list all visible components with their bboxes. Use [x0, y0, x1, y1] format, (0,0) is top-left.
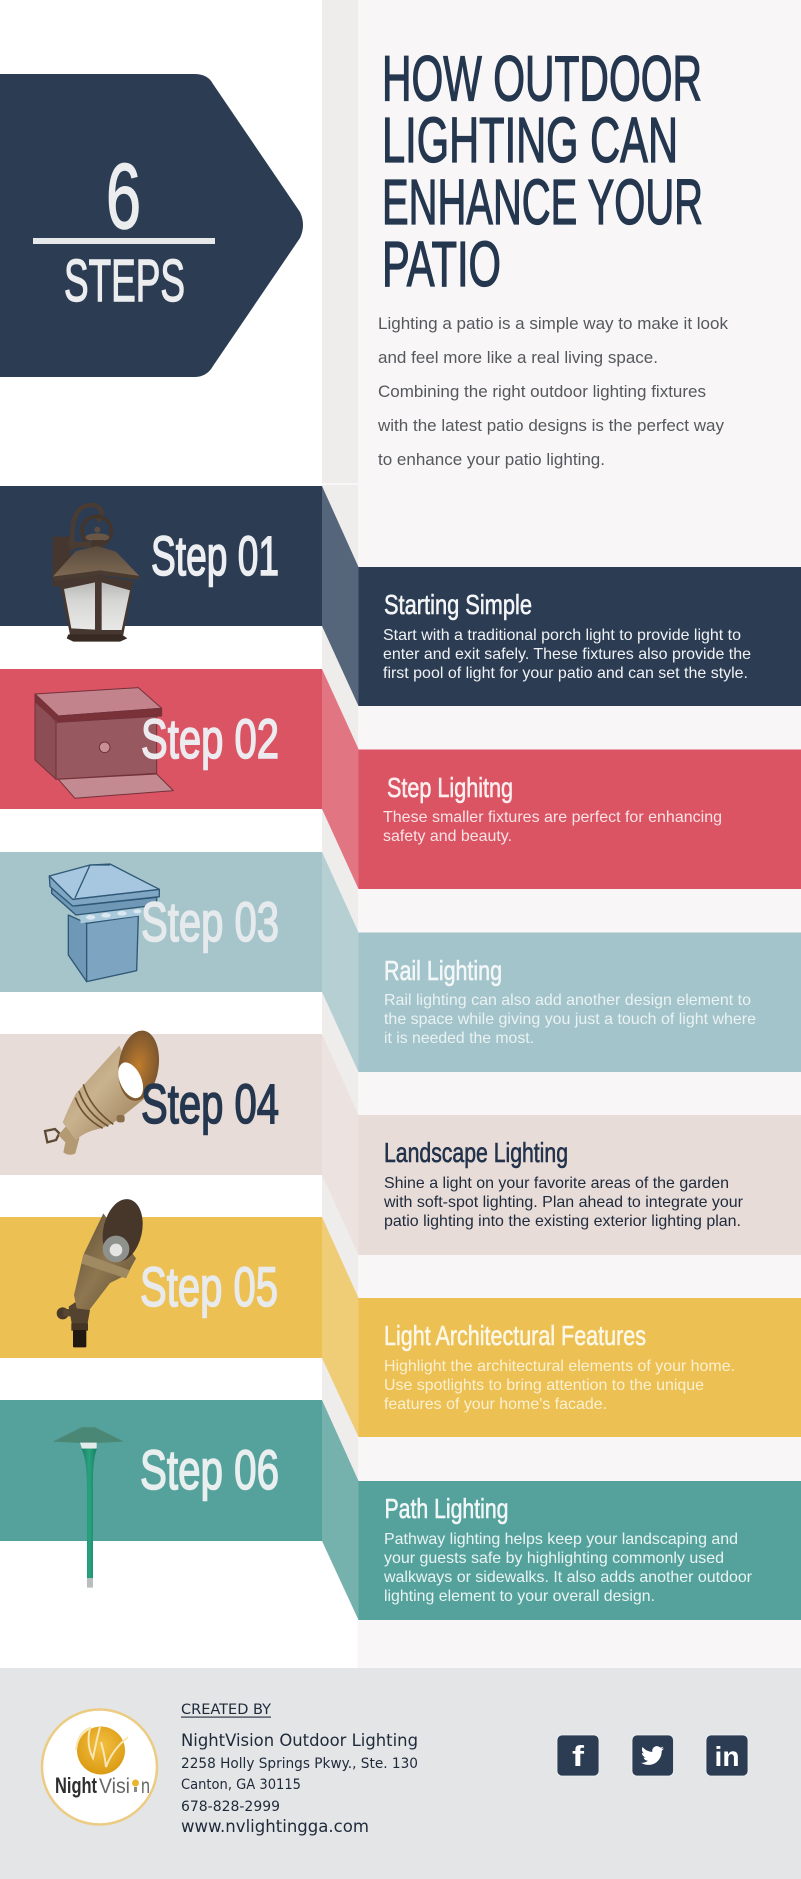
- step 04 body text: [383, 1175, 744, 1230]
- icon: brass spotlight: [45, 1028, 163, 1155]
- step 04 heading: Landscape Lighting: [384, 1137, 568, 1168]
- step 04 body text: with soft-spot lighting. Plan ahead to integrate your: [383, 1194, 744, 1211]
- contact details: 678-828-2999: [181, 1799, 280, 1815]
- icon: twitter: [632, 1735, 674, 1776]
- step 01 body text: Start with a traditional porch light to provide light to: [383, 627, 741, 644]
- step 02 description box: [358, 750, 801, 889]
- step 03 connector: [322, 852, 358, 1072]
- intro paragraph: with the latest patio designs is the perfect way: [377, 416, 724, 435]
- step 03 body text: [384, 992, 756, 1047]
- step 02 body text: safety and beauty.: [383, 828, 512, 845]
- step 05 connector: [322, 1217, 358, 1437]
- title: [382, 42, 703, 300]
- step 02 body text: These smaller fixtures are perfect for enhancing: [383, 809, 722, 826]
- icon: facebook: [557, 1735, 599, 1776]
- step 04 band: [0, 1034, 358, 1255]
- step 05 body text: features of your home's facade.: [384, 1396, 607, 1413]
- step 02 connector: [322, 669, 358, 889]
- step 02 label: Step 02: [141, 707, 279, 770]
- icon: linkedin: in: [714, 1741, 740, 1772]
- intro paragraph: [377, 314, 728, 469]
- step 05 band: [0, 1217, 358, 1437]
- footer: [0, 1668, 801, 1879]
- step 06 body text: Pathway lighting helps keep your landscaping and: [384, 1531, 738, 1548]
- step 01 body text: enter and exit safely. These fixtures also provide the: [383, 646, 751, 663]
- grey connecting column: [322, 0, 358, 1481]
- step 05 body text: [384, 1358, 735, 1413]
- created by heading: CREATED BY: [181, 1702, 271, 1718]
- step 05 body text: Use spotlights to bring attention to the unique: [384, 1377, 704, 1394]
- badge divider: [33, 238, 215, 244]
- step 06 body text: your guests safe by highlighting commonly used: [384, 1550, 724, 1567]
- step 04 body text: patio lighting into the existing exterior lighting plan.: [384, 1213, 741, 1230]
- step 06 band: [0, 1400, 358, 1620]
- step 01 description box: [358, 567, 801, 706]
- logo wordmark: Night: [55, 1773, 98, 1798]
- contact details: Canton, GA 30115: [181, 1777, 301, 1793]
- step 02 body text: [383, 809, 722, 845]
- logo wordmark: n: [141, 1775, 150, 1798]
- step 03 body text: Rail lighting can also add another design element to: [384, 992, 751, 1009]
- step 05 body text: Highlight the architectural elements of your home.: [384, 1358, 735, 1375]
- logo script monogram: [76, 1727, 128, 1767]
- step 01 connector: [322, 486, 358, 706]
- step 06 connector: [322, 1400, 358, 1620]
- step 01 label: Step 01: [151, 524, 279, 587]
- step 01 band: [0, 486, 358, 706]
- contact details: NightVision Outdoor Lighting: [181, 1731, 418, 1750]
- logo wordmark: [55, 1773, 150, 1798]
- step 05 heading: Light Architectural Features: [384, 1320, 646, 1351]
- step 06 description box: [358, 1481, 801, 1620]
- step 06 heading: Path Lighting: [384, 1493, 508, 1524]
- logo wordmark: Visi: [99, 1775, 130, 1798]
- step 03 description box: [358, 932, 801, 1072]
- icon: step light: [35, 688, 173, 798]
- icon: facebook: f: [572, 1741, 584, 1773]
- intro paragraph: Lighting a patio is a simple way to make it look: [378, 314, 728, 333]
- intro paragraph: Combining the right outdoor lighting fixtures: [378, 382, 706, 401]
- step 02 heading: Step Lighitng: [387, 772, 513, 803]
- step 01 body text: first pool of light for your patio and can set the style.: [383, 665, 748, 682]
- icon: bronze spotlight: [57, 1195, 148, 1347]
- hexagon badge: 6 steps: [0, 74, 303, 377]
- step 03 label: Step 03: [141, 890, 279, 953]
- step 02 band: [0, 669, 358, 889]
- step 03 heading: Rail Lighting: [384, 955, 502, 986]
- title: PATIO: [382, 228, 501, 300]
- logo gold ball: [77, 1726, 125, 1774]
- step 03 body text: it is needed the most.: [384, 1030, 534, 1047]
- step 06 body text: [383, 1531, 753, 1605]
- contact details: www.nvlightingga.com: [181, 1817, 369, 1836]
- icon: path light: [53, 1427, 124, 1588]
- badge label: STEPS: [64, 248, 185, 314]
- icon: porch lantern: [53, 505, 140, 642]
- intro paragraph: and feel more like a real living space.: [378, 348, 658, 367]
- step 05 label: Step 05: [140, 1255, 278, 1318]
- step 04 connector: [322, 1034, 358, 1255]
- intro paragraph: to enhance your patio lighting.: [378, 450, 605, 469]
- step 01 body text: [383, 627, 751, 682]
- step 03 body text: the space while giving you just a touch of light where: [384, 1011, 756, 1028]
- step 06 body text: lighting element to your overall design.: [384, 1588, 655, 1605]
- right background panel: [358, 0, 801, 1668]
- step 06 label: Step 06: [140, 1438, 279, 1501]
- contact details: [181, 1731, 418, 1836]
- icon: rail light: [49, 864, 159, 982]
- step 01 heading: Starting Simple: [384, 589, 532, 620]
- step 06 body text: walkways or sidewalks. It also adds another outdoor: [383, 1569, 753, 1586]
- badge number: 6: [106, 144, 141, 248]
- contact details: 2258 Holly Springs Pkwy., Ste. 130: [181, 1756, 418, 1772]
- logo: [42, 1710, 157, 1824]
- step 03 band: [0, 852, 358, 1072]
- step 05 description box: [358, 1298, 801, 1437]
- icon: linkedin: [706, 1735, 748, 1776]
- step 04 label: Step 04: [141, 1072, 279, 1135]
- step 04 description box: [358, 1115, 801, 1255]
- step 04 body text: Shine a light on your favorite areas of the garden: [384, 1175, 729, 1192]
